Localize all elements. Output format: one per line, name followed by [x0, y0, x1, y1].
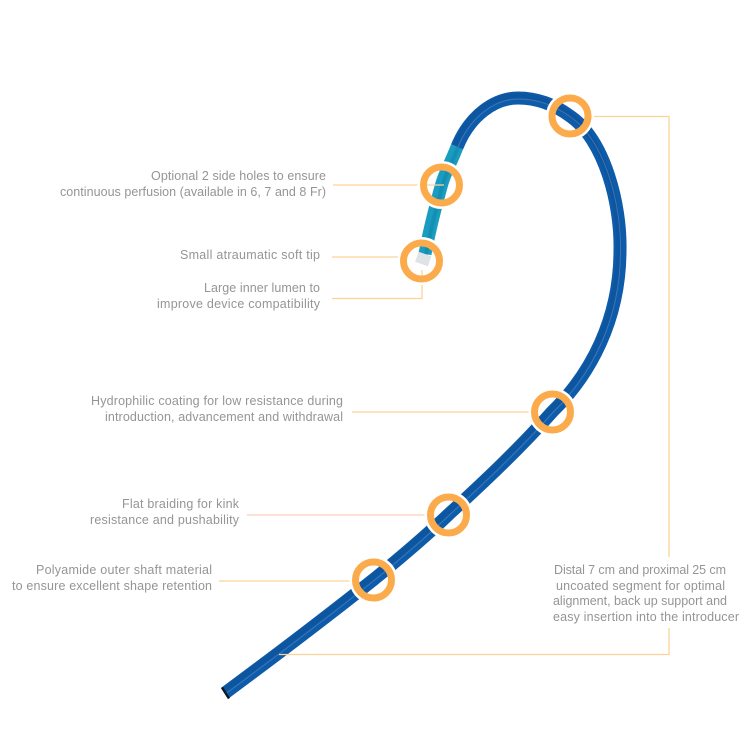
label: side holes: continuous perfusion (available in 6, 7 and 8 Fr)	[60, 185, 326, 199]
ring: polyamide	[352, 558, 396, 602]
label: hydrophilic coating	[91, 394, 343, 424]
label: polyamide: to ensure excellent shape retention	[12, 579, 212, 593]
label: polyamide	[12, 563, 212, 593]
label: inner lumen	[157, 281, 321, 311]
blue shaft	[224, 96, 621, 694]
leader line: inner lumen	[332, 270, 422, 298]
ring: flat braiding	[426, 493, 470, 537]
label: uncoated segment: uncoated segment for optimal	[556, 579, 725, 593]
ring: hydrophilic coating	[530, 390, 574, 434]
label: side holes	[60, 169, 326, 199]
label: inner lumen: improve device compatibility	[157, 297, 321, 311]
label: soft tip: Small atraumatic soft tip	[180, 248, 320, 262]
label: uncoated segment: easy insertion into the introducer	[553, 610, 739, 624]
ring markers	[352, 94, 592, 602]
leader line: soft tip	[332, 256, 402, 258]
leader line: uncoated segment, upper	[590, 116, 669, 557]
label: uncoated segment	[553, 563, 739, 624]
leader line: hydrophilic coating	[352, 411, 534, 413]
label: side holes: Optional 2 side holes to ensure	[151, 169, 326, 183]
ring: side holes	[420, 163, 464, 207]
label: flat braiding	[90, 497, 240, 527]
label: flat braiding: Flat braiding for kink	[122, 497, 240, 511]
ring: soft tip	[400, 239, 444, 283]
leader line: side holes	[333, 184, 444, 186]
label: hydrophilic coating: Hydrophilic coating for low resistance during	[91, 394, 343, 408]
leader line: uncoated segment, lower	[279, 628, 669, 654]
label: flat braiding: resistance and pushability	[90, 513, 240, 527]
label: hydrophilic coating: introduction, advancement and withdrawal	[105, 410, 343, 424]
label: uncoated segment: Distal 7 cm and proximal 25 cm	[554, 563, 726, 577]
ring: uncoated segment	[548, 94, 592, 138]
leader line: polyamide	[219, 580, 354, 582]
label: uncoated segment: alignment, back up support and	[553, 594, 727, 608]
shaft proximal end	[222, 688, 229, 698]
label: polyamide: Polyamide outer shaft material	[36, 563, 212, 577]
soft tip	[422, 254, 425, 264]
teal distal segment	[425, 147, 458, 254]
catheter: blue shaft with teal distal segment and soft tip	[222, 96, 621, 698]
label: inner lumen: Large inner lumen to	[204, 281, 320, 295]
leader line: flat braiding	[247, 514, 430, 516]
